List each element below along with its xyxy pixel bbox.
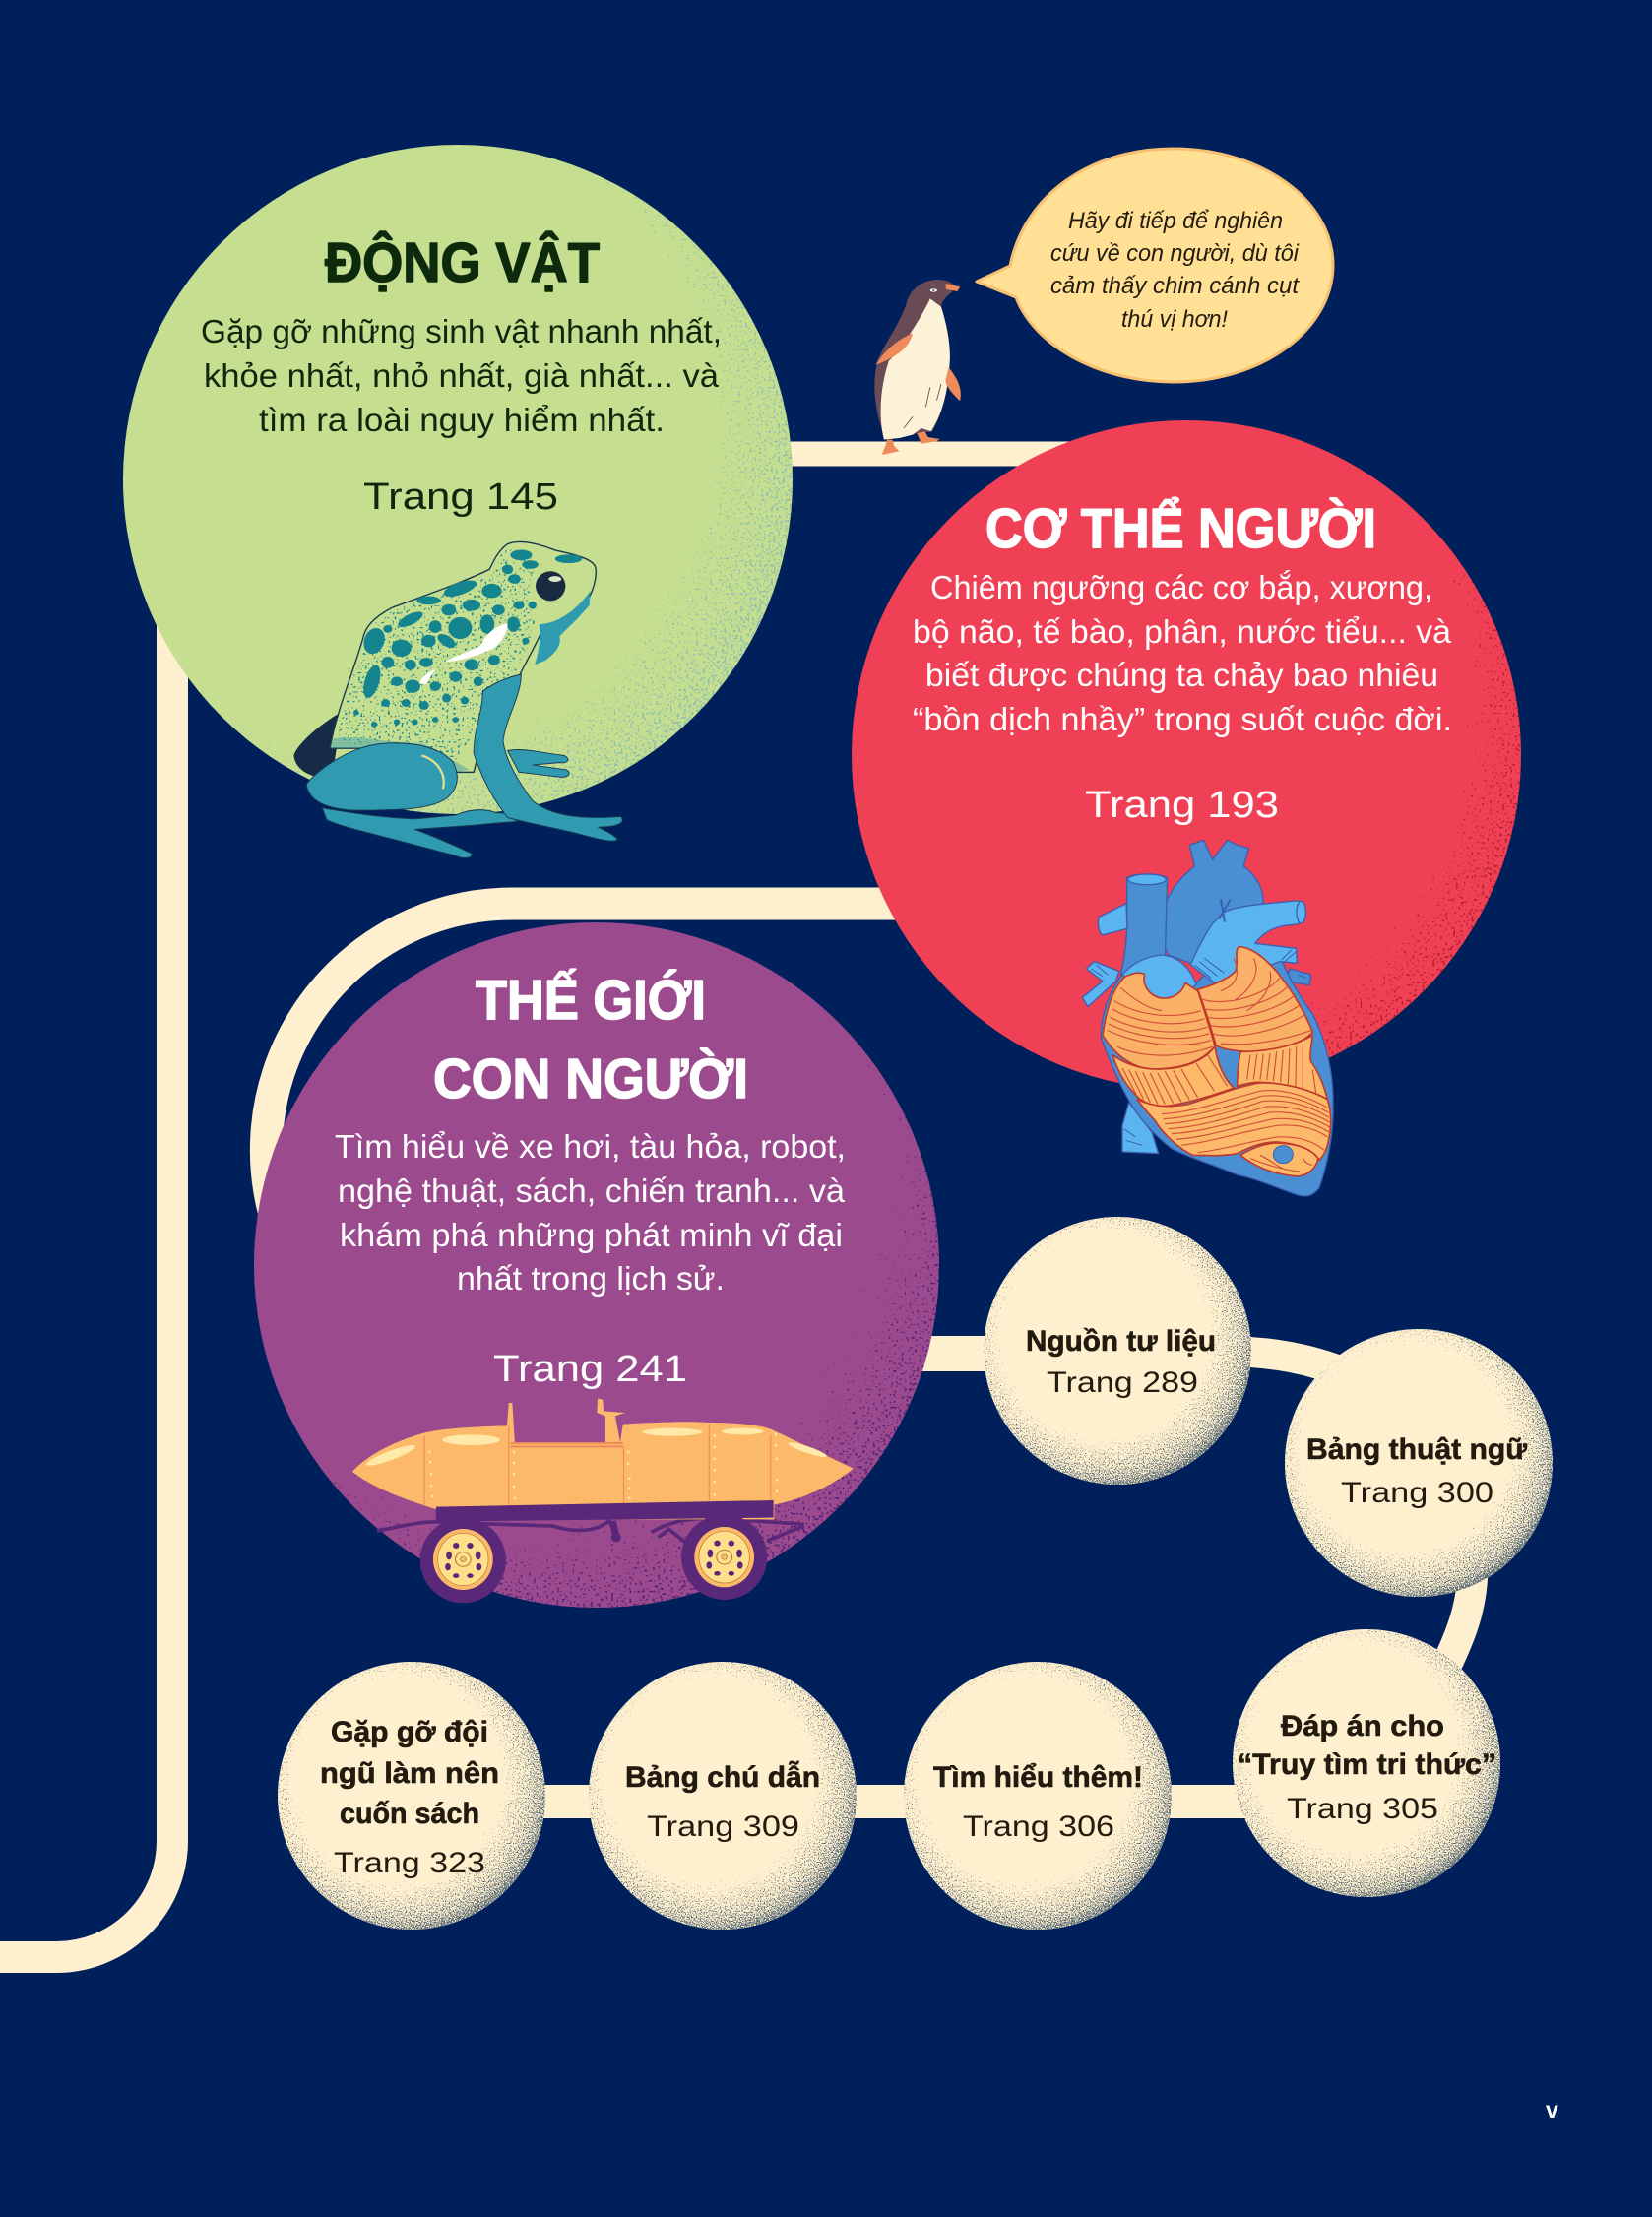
heading: human body: CƠ THỂ NGƯỜI	[985, 496, 1376, 560]
page number: index: Trang 309	[647, 1810, 799, 1843]
heading: human world: CON NGƯỜI	[433, 1047, 748, 1110]
page number: learn more: Trang 306	[963, 1810, 1114, 1843]
icon: penguin	[874, 280, 961, 455]
panel: quiz answers	[1233, 1629, 1500, 1897]
text block: human body description: bộ não, tế bào, phân, nước tiểu... và	[913, 613, 1452, 650]
text block: human world description: khám phá những phát minh vĩ đại	[340, 1217, 843, 1253]
text block: human world description: Tìm hiểu về xe hơi, tàu hỏa, robot,	[335, 1128, 846, 1165]
text block: human body description	[913, 569, 1452, 737]
label: index: Bảng chú dẫn	[625, 1760, 820, 1794]
panel: sources	[984, 1217, 1251, 1485]
page number: human world: Trang 241	[493, 1349, 687, 1390]
label: team: ngũ làm nên	[320, 1757, 499, 1790]
heading: animals: ĐỘNG VẬT	[325, 230, 600, 294]
page folio: v	[1546, 2097, 1558, 2122]
panel: glossary	[1285, 1329, 1553, 1597]
text block: human world description	[335, 1128, 846, 1297]
panel: human world	[254, 922, 939, 1608]
text block: human world description: nhất trong lịch sử.	[457, 1260, 725, 1297]
page number: sources: Trang 289	[1047, 1366, 1198, 1399]
label: team	[320, 1716, 499, 1830]
panel: learn more	[904, 1662, 1172, 1930]
icon: heart	[1082, 840, 1333, 1196]
connecting path	[0, 454, 1473, 1957]
text block: animals description: tìm ra loài nguy hiểm nhất.	[259, 402, 665, 438]
label: learn more: Tìm hiểu thêm!	[933, 1761, 1143, 1794]
label: quiz answers: Đáp án cho	[1281, 1710, 1444, 1742]
label: team: Gặp gỡ đội	[331, 1716, 488, 1748]
page number: quiz answers: Trang 305	[1287, 1793, 1438, 1825]
label: team: cuốn sách	[340, 1798, 479, 1830]
panel: team	[278, 1662, 545, 1930]
page number: animals: Trang 145	[363, 476, 558, 518]
text block: speech: Hãy đi tiếp để nghiên	[1068, 208, 1283, 234]
panel: animals	[123, 145, 793, 857]
page number: glossary: Trang 300	[1341, 1477, 1493, 1509]
text block: speech: cảm thấy chim cánh cụt	[1050, 273, 1300, 299]
label: glossary: Bảng thuật ngữ	[1306, 1433, 1527, 1466]
text block: human body description: biết được chúng ta chảy bao nhiêu	[925, 657, 1438, 693]
page number: team: Trang 323	[334, 1847, 485, 1879]
panel: index	[589, 1662, 857, 1930]
text block: animals description: Gặp gỡ những sinh vật nhanh nhất,	[201, 313, 722, 349]
label: quiz answers: “Truy tìm tri thức”	[1238, 1748, 1496, 1781]
text block: human body description: “bồn dịch nhầy” trong suốt cuộc đời.	[913, 701, 1452, 737]
text block: human body description: Chiêm ngưỡng các cơ bắp, xương,	[930, 569, 1432, 605]
text block: animals description: khỏe nhất, nhỏ nhất, già nhất... và	[204, 357, 720, 394]
text block: human world description: nghệ thuật, sách, chiến tranh... và	[338, 1172, 846, 1209]
heading: human world: THẾ GIỚI	[476, 968, 706, 1032]
icon: car	[352, 1399, 854, 1603]
label: quiz answers	[1238, 1710, 1496, 1781]
text block: speech: thú vị hơn!	[1121, 306, 1228, 333]
text block: animals description	[201, 313, 722, 438]
heading: human world	[433, 968, 748, 1110]
text block: speech: cứu về con người, dù tôi	[1050, 240, 1300, 267]
speech bubble	[977, 149, 1333, 382]
text block: speech	[1050, 208, 1300, 333]
page number: human body: Trang 193	[1085, 785, 1279, 826]
icon: frog	[293, 542, 622, 857]
panel: human body	[852, 420, 1521, 1196]
label: sources: Nguồn tư liệu	[1026, 1325, 1216, 1358]
